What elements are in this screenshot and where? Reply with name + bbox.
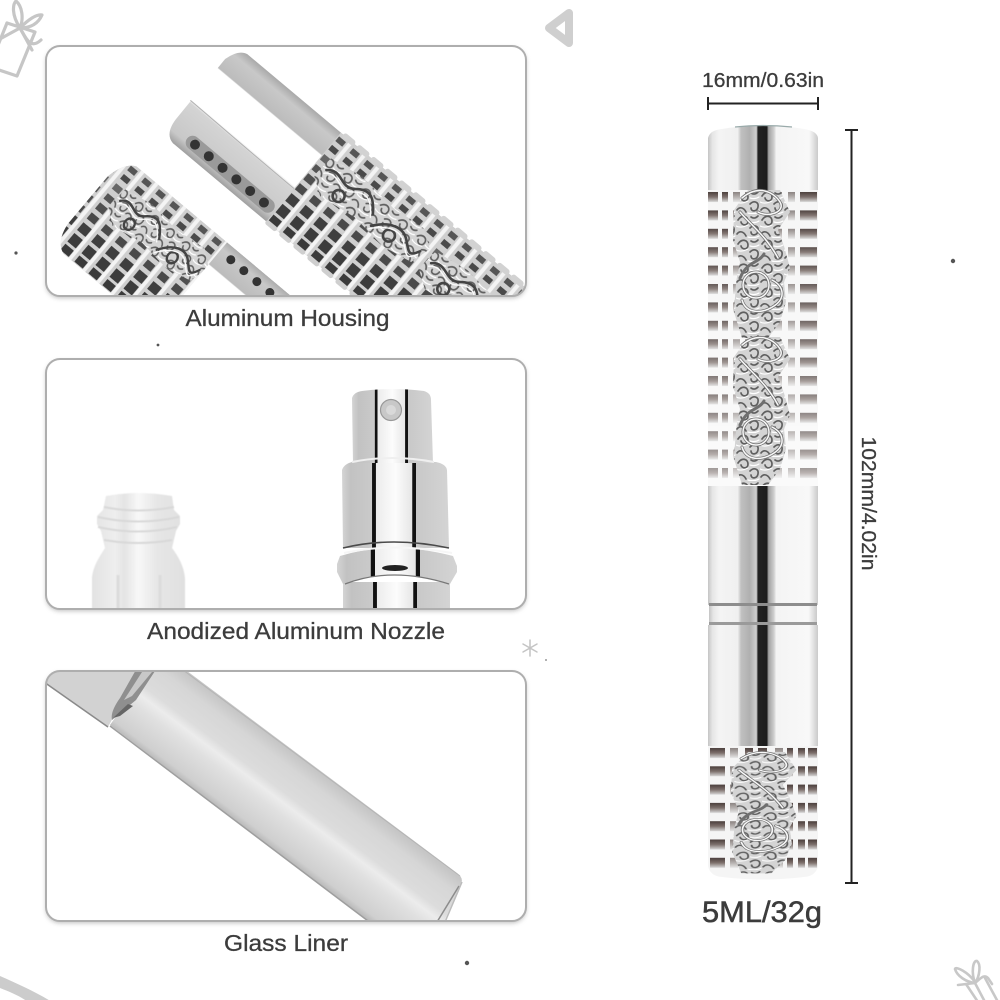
decorative curve bottom-left bbox=[0, 976, 52, 1000]
dimension: width label: 16mm/0.63in bbox=[702, 70, 824, 92]
upper body bbox=[708, 126, 818, 605]
image: housing tube large bbox=[170, 52, 524, 295]
image: metal collar bbox=[47, 672, 154, 728]
label: capacity and weight: 5ML/32g bbox=[702, 896, 822, 929]
icon: rounded triangle bbox=[549, 13, 569, 43]
icon: snowflake bbox=[523, 640, 537, 656]
panel: glass liner bbox=[44, 668, 526, 924]
lower body bbox=[708, 625, 818, 880]
dot bbox=[465, 961, 469, 965]
product: atomizer full view bbox=[708, 126, 818, 880]
icon: gift top-left bbox=[0, 1, 42, 76]
label: Glass Liner: Glass Liner bbox=[224, 930, 348, 956]
image: metal nozzle bbox=[337, 389, 457, 612]
label: Anodized Aluminum Nozzle: Anodized Aluminum Nozzle bbox=[147, 618, 445, 644]
dot bbox=[545, 659, 547, 661]
dimension: height label: 102mm/4.02in bbox=[857, 436, 879, 570]
dot bbox=[14, 251, 18, 255]
icon: gift bottom-right bbox=[955, 961, 998, 1000]
panel: aluminum housing bbox=[44, 45, 528, 300]
collar bbox=[709, 603, 817, 625]
image: glass tube bbox=[110, 668, 462, 924]
dimension: height arrow bbox=[845, 130, 858, 883]
dimension: width arrow bbox=[708, 97, 818, 110]
label: Aluminum Housing: Aluminum Housing bbox=[186, 305, 390, 331]
image: glass bottle neck bbox=[92, 493, 185, 610]
dot bbox=[157, 344, 159, 346]
dot bbox=[951, 259, 955, 263]
panel: anodized aluminum nozzle bbox=[46, 359, 526, 612]
image: housing tube small bbox=[60, 166, 290, 295]
